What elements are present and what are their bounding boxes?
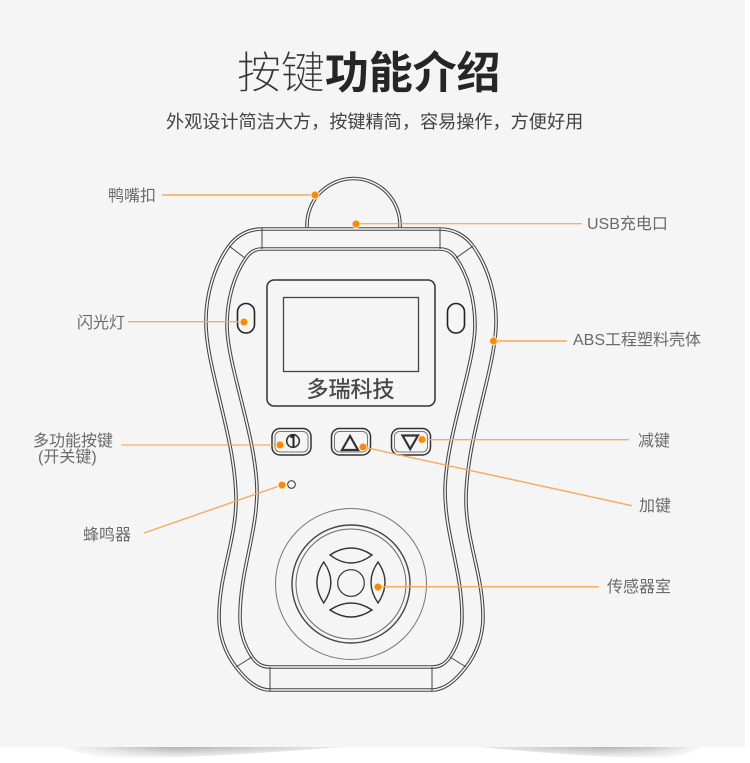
leader: duck clip bbox=[162, 191, 319, 199]
leader: USB port bbox=[352, 220, 582, 228]
power button bbox=[272, 428, 311, 455]
up button bbox=[332, 428, 370, 455]
label: flashlight: 闪光灯 bbox=[77, 314, 125, 332]
screen bezel bbox=[267, 280, 435, 406]
leader: ABS shell bbox=[490, 337, 567, 345]
lanyard ring bbox=[307, 178, 400, 229]
display window bbox=[284, 298, 418, 372]
label: multifunction key: 多功能按键 bbox=[33, 432, 113, 450]
label: buzzer: 蜂鸣器 bbox=[83, 526, 131, 544]
device outer shell bbox=[206, 229, 496, 690]
leader: flashlight bbox=[128, 318, 248, 326]
leader: buzzer bbox=[144, 481, 286, 533]
title: 按键功能介绍 bbox=[237, 49, 500, 98]
flashlight right bbox=[448, 304, 464, 333]
label: sensor chamber: 传感器室 bbox=[607, 578, 671, 596]
brand text: 多瑞科技 bbox=[306, 377, 395, 402]
leader: multifunction key bbox=[121, 441, 284, 449]
label: plus key: 加键 bbox=[639, 497, 671, 515]
down button bbox=[392, 428, 430, 455]
bottom shadow bbox=[0, 740, 750, 763]
label: multifunction key bbox=[33, 432, 113, 466]
label: USB port: USB充电口 bbox=[587, 215, 668, 233]
shell seams bbox=[229, 228, 473, 691]
leader: sensor bbox=[374, 583, 599, 591]
sensor chamber bbox=[276, 508, 426, 660]
device inner shell bbox=[227, 249, 475, 667]
leader: minus key bbox=[418, 436, 629, 444]
label: ABS shell: ABS工程塑料壳体 bbox=[573, 331, 701, 349]
buzzer hole bbox=[288, 481, 295, 488]
label: multifunction key: (开关键) bbox=[38, 448, 97, 466]
leader: plus key bbox=[359, 443, 632, 506]
device drawing bbox=[206, 178, 496, 691]
label: duck clip: 鸭嘴扣 bbox=[108, 187, 156, 205]
label: minus key: 减键 bbox=[638, 432, 670, 450]
flashlight left bbox=[238, 304, 254, 333]
subtitle: 外观设计简洁大方，按键精简，容易操作，方便好用 bbox=[166, 112, 583, 132]
